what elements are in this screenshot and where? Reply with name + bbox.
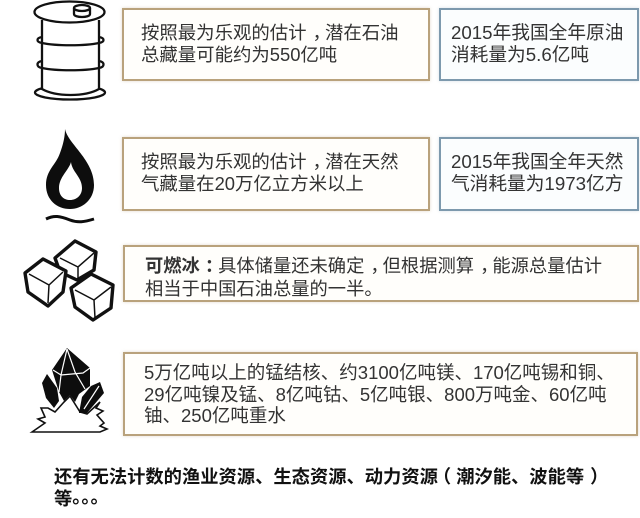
text: combustible ice (145, 255, 602, 299)
icon: natural gas flame (45, 129, 94, 224)
text: gas reserve estimate (141, 151, 399, 194)
text: gas consumption (451, 151, 623, 194)
panel: oil reserve estimate (122, 8, 430, 81)
text: closing note: 还有无法计数的渔业资源、生态资源、动力资源（ 潮汐能、波能等 ） (54, 466, 608, 487)
icon: mineral crystals (30, 348, 109, 433)
panel: gas consumption (439, 137, 639, 211)
panel: gas reserve estimate (122, 137, 430, 211)
text: closing note: 等。。。 (54, 486, 109, 509)
text: gas consumption: 2015年我国全年天然 (451, 151, 623, 172)
text: combustible ice: 可燃冰 ：具体储量还未确定 ，但根据测算 ，能源总量估计 (145, 255, 602, 276)
text: oil consumption: 2015年我国全年原油 (451, 22, 623, 43)
panel: mineral resources (123, 352, 638, 436)
text: oil reserve estimate: 按照最为乐观的估计 ，潜在石油 (141, 22, 399, 43)
text: gas reserve estimate: 按照最为乐观的估计 ，潜在天然 (141, 151, 399, 172)
text: oil reserve estimate: 总藏量可能约为550亿吨 (141, 44, 337, 65)
text: combustible ice: 相当于中国石油总量的一半。 (145, 278, 383, 299)
text: mineral resources: 5万亿吨以上的锰结核、约3100亿吨镁、170亿吨锡和铜、 (144, 362, 615, 383)
text: mineral resources: 铀、250亿吨重水 (144, 405, 286, 426)
text: mineral resources (144, 362, 615, 426)
text: oil consumption (451, 22, 623, 65)
text: oil consumption: 消耗量为5.6亿吨 (451, 44, 589, 65)
text: oil reserve estimate (141, 22, 399, 65)
text: gas consumption: 气消耗量为1973亿方 (451, 173, 623, 194)
text: closing note (54, 466, 608, 509)
icon: ice cubes (23, 239, 115, 322)
panel: combustible ice (123, 245, 639, 302)
text: mineral resources: 29亿吨镍及锰、8亿吨钴、5亿吨银、800万吨金、60亿吨 (144, 384, 607, 404)
text: gas reserve estimate: 气藏量在20万亿立方米以上 (141, 173, 364, 194)
icon: oil barrel (33, 0, 106, 101)
panel: oil consumption (439, 8, 639, 81)
